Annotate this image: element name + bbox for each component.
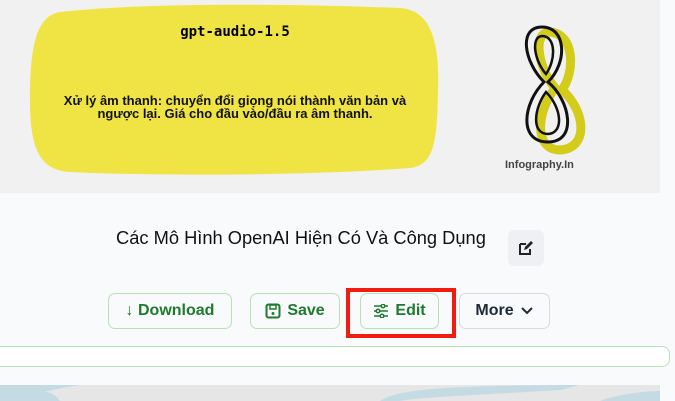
description: Xử lý âm thanh: chuyển đổi giọng nói thành văn bản và bbox=[64, 93, 406, 108]
logo text: Infography.In bbox=[505, 159, 574, 171]
icon: edit pencil bbox=[508, 230, 544, 266]
logo 8 bbox=[526, 27, 581, 150]
red highlight box bbox=[346, 288, 456, 338]
button: edit bbox=[360, 293, 439, 329]
yellow blob card bbox=[30, 4, 586, 175]
description bbox=[64, 93, 406, 120]
heading: Các Mô Hình OpenAI Hiện Có Và Công Dụng bbox=[116, 227, 486, 248]
button: download: ↓ Download bbox=[126, 302, 214, 319]
next infographic preview bbox=[0, 385, 660, 401]
divider strip bbox=[0, 346, 670, 367]
button: download bbox=[108, 293, 232, 329]
button: save: Save bbox=[287, 302, 325, 319]
button: save bbox=[250, 293, 340, 329]
button: more: More bbox=[475, 302, 514, 319]
title: gpt-audio-1.5 bbox=[180, 24, 290, 40]
description: ngược lại. Giá cho đầu vào/đầu ra âm thanh. bbox=[97, 106, 373, 120]
infographic preview image bbox=[0, 0, 660, 193]
button: edit: Edit bbox=[395, 302, 426, 319]
button: more bbox=[459, 293, 550, 329]
